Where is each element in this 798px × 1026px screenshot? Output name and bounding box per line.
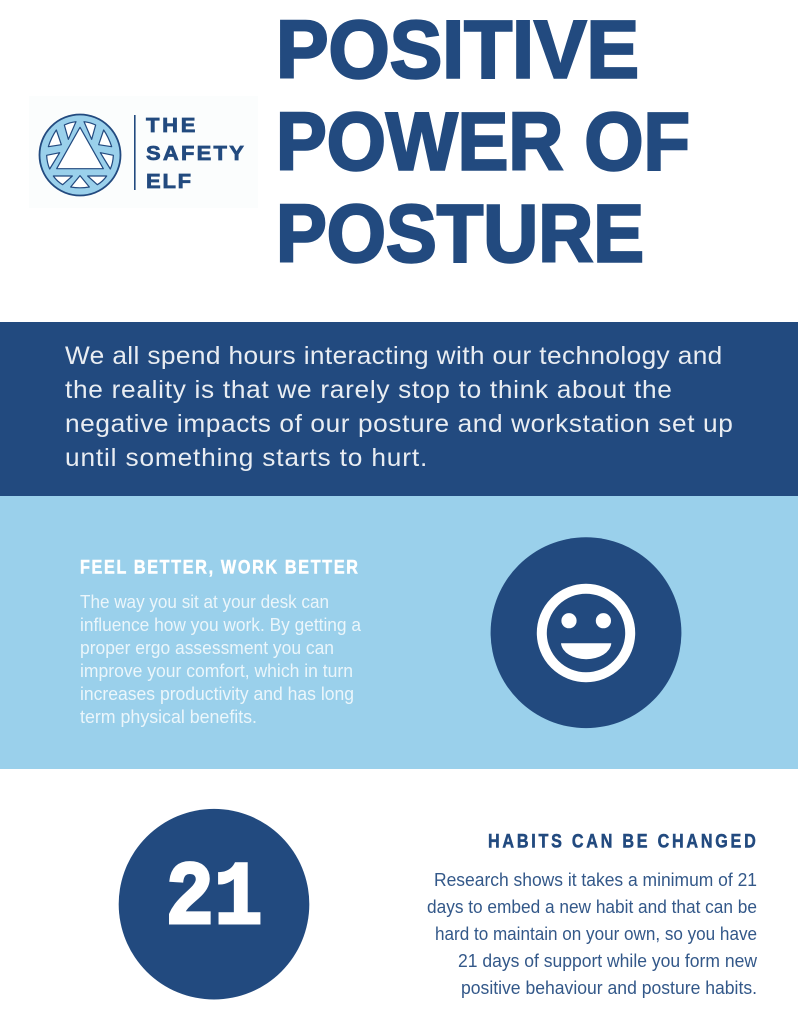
body text: 21 days of support while you form new	[458, 951, 758, 971]
intro text	[65, 343, 733, 472]
number badge: 21: 21	[166, 849, 262, 951]
body text	[427, 870, 758, 998]
title: POWER OF	[276, 96, 690, 188]
body text: improve your comfort, which in turn	[80, 661, 353, 681]
panel: habits can be changed	[119, 809, 758, 1000]
heading: HABITS CAN BE CHANGED	[488, 830, 756, 852]
intro text: We all spend hours interacting with our technology and	[65, 343, 722, 370]
body text: positive behaviour and posture habits.	[461, 978, 757, 998]
body text: days to embed a new habit and that can be	[427, 897, 757, 917]
title	[276, 4, 690, 280]
body text	[80, 592, 362, 727]
body text: proper ergo assessment you can	[80, 638, 334, 658]
heading: FEEL BETTER, WORK BETTER	[80, 556, 358, 578]
intro text: until something starts to hurt.	[65, 445, 427, 472]
number badge: 21	[119, 809, 309, 1000]
body text: Research shows it takes a minimum of 21	[434, 870, 757, 890]
header logo: The Safety Elf	[29, 96, 258, 208]
body text: The way you sit at your desk can	[80, 592, 329, 612]
title: POSTURE	[276, 188, 644, 280]
panel: introduction	[0, 322, 798, 496]
body text: increases productivity and has long	[80, 684, 354, 704]
body text: hard to maintain on your own, so you have	[435, 924, 757, 944]
body text: term physical benefits.	[80, 707, 257, 727]
body text: influence how you work. By getting a	[80, 615, 362, 635]
panel: feel better, work better	[0, 496, 798, 769]
header logo: The Safety Elf: ELF	[146, 171, 191, 193]
header logo: The Safety Elf: SAFETY	[146, 143, 244, 165]
icon: smiley face in circle	[491, 537, 681, 728]
intro text: the reality is that we rarely stop to think about the	[65, 377, 672, 404]
header logo: The Safety Elf: THE	[146, 115, 196, 137]
intro text: negative impacts of our posture and workstation set up	[65, 411, 733, 438]
title: POSITIVE	[276, 4, 639, 96]
